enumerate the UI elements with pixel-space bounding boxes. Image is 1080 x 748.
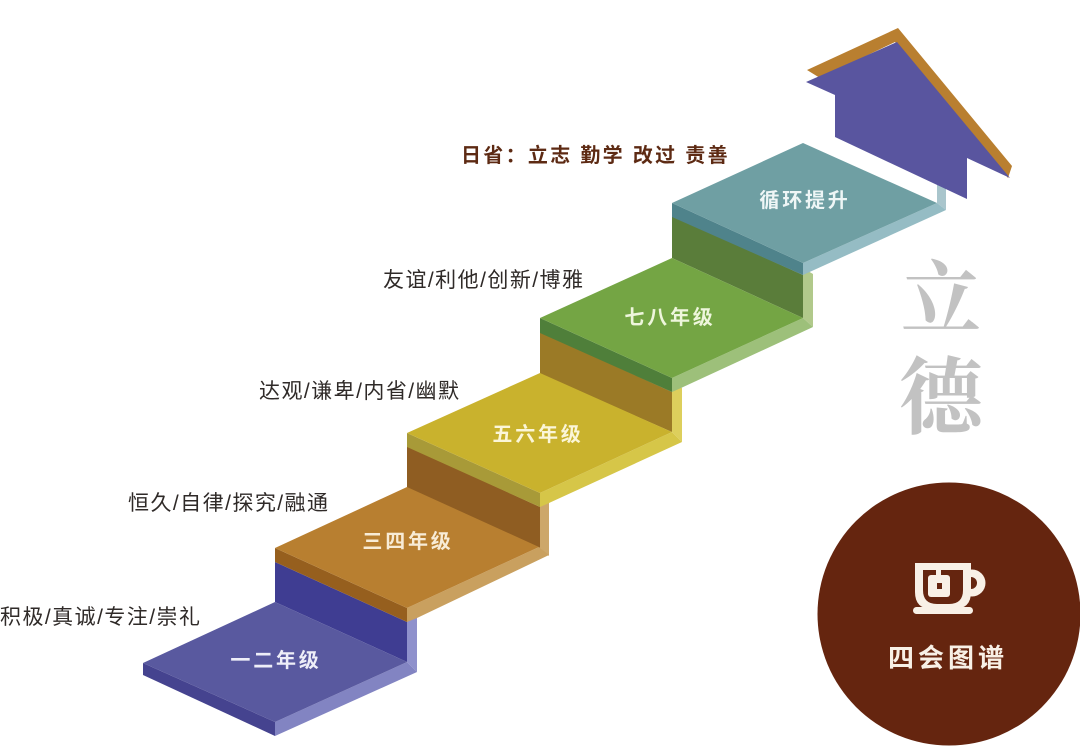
- step 2: grades 3-4: [275, 446, 549, 622]
- text: optimism, humility, introspection, humour: 达观/谦卑/内省/幽默: [259, 380, 460, 403]
- step 5: continuous improvement: 循环提升: [759, 189, 851, 212]
- step 1: grades 1-2: [143, 562, 417, 736]
- step 3: grades 5-6: [407, 332, 682, 507]
- calligraphy: moral education: 立: [901, 235, 981, 350]
- step 5: continuous improvement: [672, 143, 946, 275]
- icon: teacup: [913, 563, 986, 614]
- step 2: grades 3-4: 三四年级: [362, 530, 454, 553]
- calligraphy: moral education: 德: [899, 331, 989, 452]
- text: perseverance, discipline, inquiry, integration: 恒久/自律/探究/融通: [128, 492, 329, 515]
- step 4: grades 7-8: [540, 216, 813, 392]
- text: initiative, sincerity, focus, courtesy: 积极/真诚/专注/崇礼: [0, 606, 201, 629]
- badge: four skills map: [818, 482, 1080, 746]
- text: friendship, altruism, innovation, erudition: 友谊/利他/创新/博雅: [383, 269, 584, 292]
- badge title: 四会图谱: [888, 643, 1008, 673]
- staircase: [143, 143, 946, 736]
- icon: upward arrow: [806, 28, 1012, 199]
- text: daily reflection: 日省：立志 勤学 改过 责善: [461, 143, 730, 167]
- calligraphy: moral education: [899, 235, 989, 452]
- step 4: grades 7-8: 七八年级: [624, 306, 716, 329]
- step 3: grades 5-6: 五六年级: [492, 423, 584, 446]
- step 1: grades 1-2: 一二年级: [230, 649, 322, 672]
